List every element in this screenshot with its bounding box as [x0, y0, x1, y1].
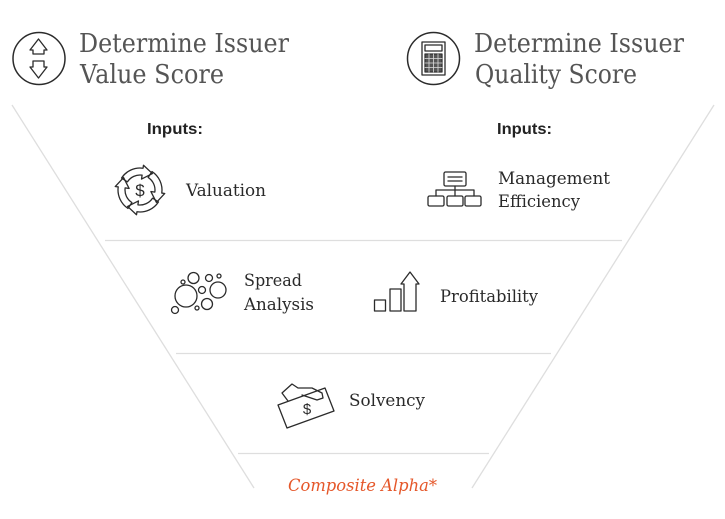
- label: spread analysis: [243, 271, 314, 315]
- icon: bubbles: [172, 272, 226, 314]
- icon: valuation cycle: [112, 162, 168, 218]
- label: valuation: Valuation: [185, 181, 266, 201]
- label: profitability: Profitability: [440, 287, 538, 307]
- label: management efficiency: Efficiency: [498, 192, 580, 212]
- heading: quality score: Quality Score: [475, 60, 637, 90]
- icon: value score arrows: [13, 32, 65, 84]
- label: management efficiency: [498, 169, 610, 212]
- inputs label left: Inputs:: [147, 121, 203, 138]
- icon: money dollar sign: $: [303, 401, 312, 418]
- heading: value score: Determine Issuer: [79, 29, 290, 59]
- funnel outline: [12, 105, 714, 488]
- heading: quality score: [474, 29, 685, 90]
- icon: money in hand: [278, 384, 334, 428]
- heading: quality score: Determine Issuer: [474, 29, 685, 59]
- label: spread analysis: Spread: [244, 271, 302, 291]
- label: management efficiency: Management: [498, 169, 610, 189]
- heading: value score: [79, 29, 290, 90]
- label: solvency: Solvency: [349, 391, 425, 411]
- composite alpha: Composite Alpha*: [288, 476, 437, 496]
- label: spread analysis: Analysis: [243, 295, 314, 315]
- icon: calculator: [408, 32, 460, 84]
- icon: org chart: [428, 172, 481, 206]
- icon: profitability bars: [374, 272, 419, 311]
- inputs label right: Inputs:: [497, 121, 552, 138]
- heading: value score: Value Score: [79, 60, 224, 90]
- icon: valuation dollar: $: [135, 181, 145, 200]
